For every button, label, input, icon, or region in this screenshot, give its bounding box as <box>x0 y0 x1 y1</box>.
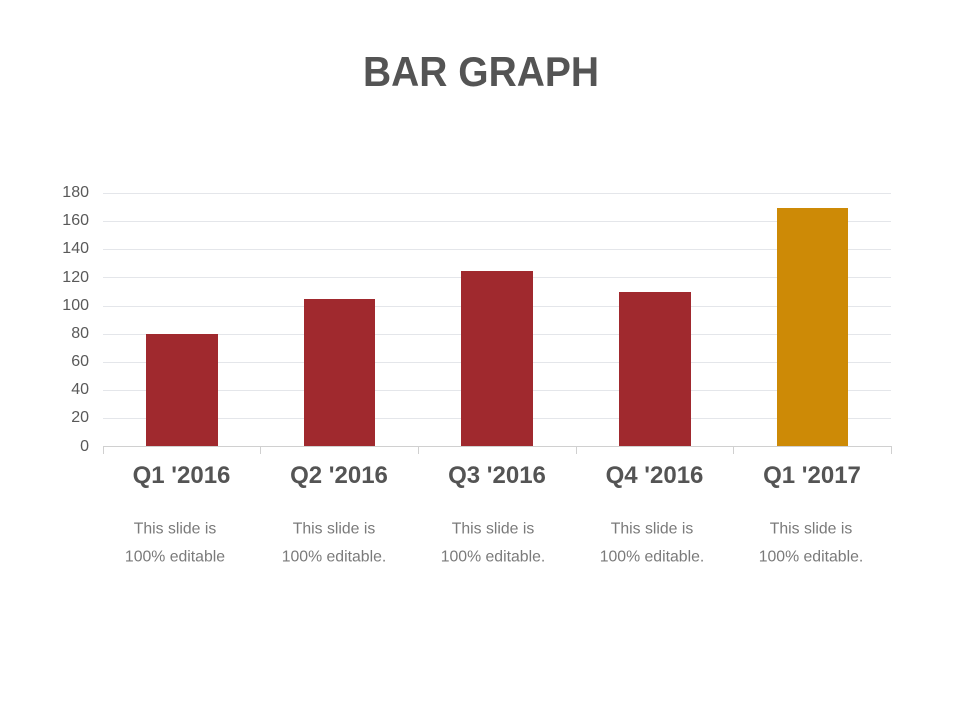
category labels: Q3 '2016 <box>448 462 546 489</box>
y axis labels <box>62 184 89 455</box>
description: Q1 2016: 100% editable <box>125 548 225 566</box>
y axis labels: 100 <box>62 297 89 314</box>
description: Q3 2016: 100% editable. <box>441 548 545 566</box>
description: Q2 2016: 100% editable. <box>282 548 386 566</box>
y axis labels: 160 <box>62 212 89 229</box>
category labels: Q4 '2016 <box>606 462 703 489</box>
bar: Q1 2016 <box>146 334 218 446</box>
description: Q4 2016: This slide is <box>611 520 693 538</box>
description: Q4 2016 <box>600 520 704 566</box>
description: Q4 2016: 100% editable. <box>600 548 704 566</box>
category labels: Q1 '2016 <box>133 462 230 489</box>
bar: Q2 2016 <box>304 299 375 446</box>
description: Q1 2017 <box>759 520 863 566</box>
x axis <box>103 446 892 454</box>
description: Q2 2016 <box>282 520 386 566</box>
category labels: Q2 '2016 <box>290 462 388 489</box>
y axis labels: 0 <box>80 438 89 455</box>
description: Q1 2016: This slide is <box>134 520 216 538</box>
y axis labels: 40 <box>71 381 89 398</box>
bar: Q3 2016 <box>461 271 533 446</box>
description: Q3 2016 <box>441 520 545 566</box>
description: Q3 2016: This slide is <box>452 520 534 538</box>
bar chart <box>62 184 892 455</box>
category labels: Q1 '2017 <box>763 462 861 489</box>
y axis labels: 80 <box>71 325 89 342</box>
title: BAR GRAPH <box>363 48 599 95</box>
y axis labels: 60 <box>71 353 89 370</box>
description: Q1 2017: 100% editable. <box>759 548 863 566</box>
category labels <box>133 462 861 489</box>
y axis labels: 120 <box>62 269 89 286</box>
y axis labels: 140 <box>62 240 89 257</box>
y axis labels: 20 <box>71 409 89 426</box>
bar: Q1 2017 <box>777 208 848 446</box>
description: Q1 2016 <box>125 520 225 566</box>
description: Q2 2016: This slide is <box>293 520 375 538</box>
y axis labels: 180 <box>62 184 89 201</box>
bar: Q4 2016 <box>619 292 691 446</box>
description: Q1 2017: This slide is <box>770 520 852 538</box>
